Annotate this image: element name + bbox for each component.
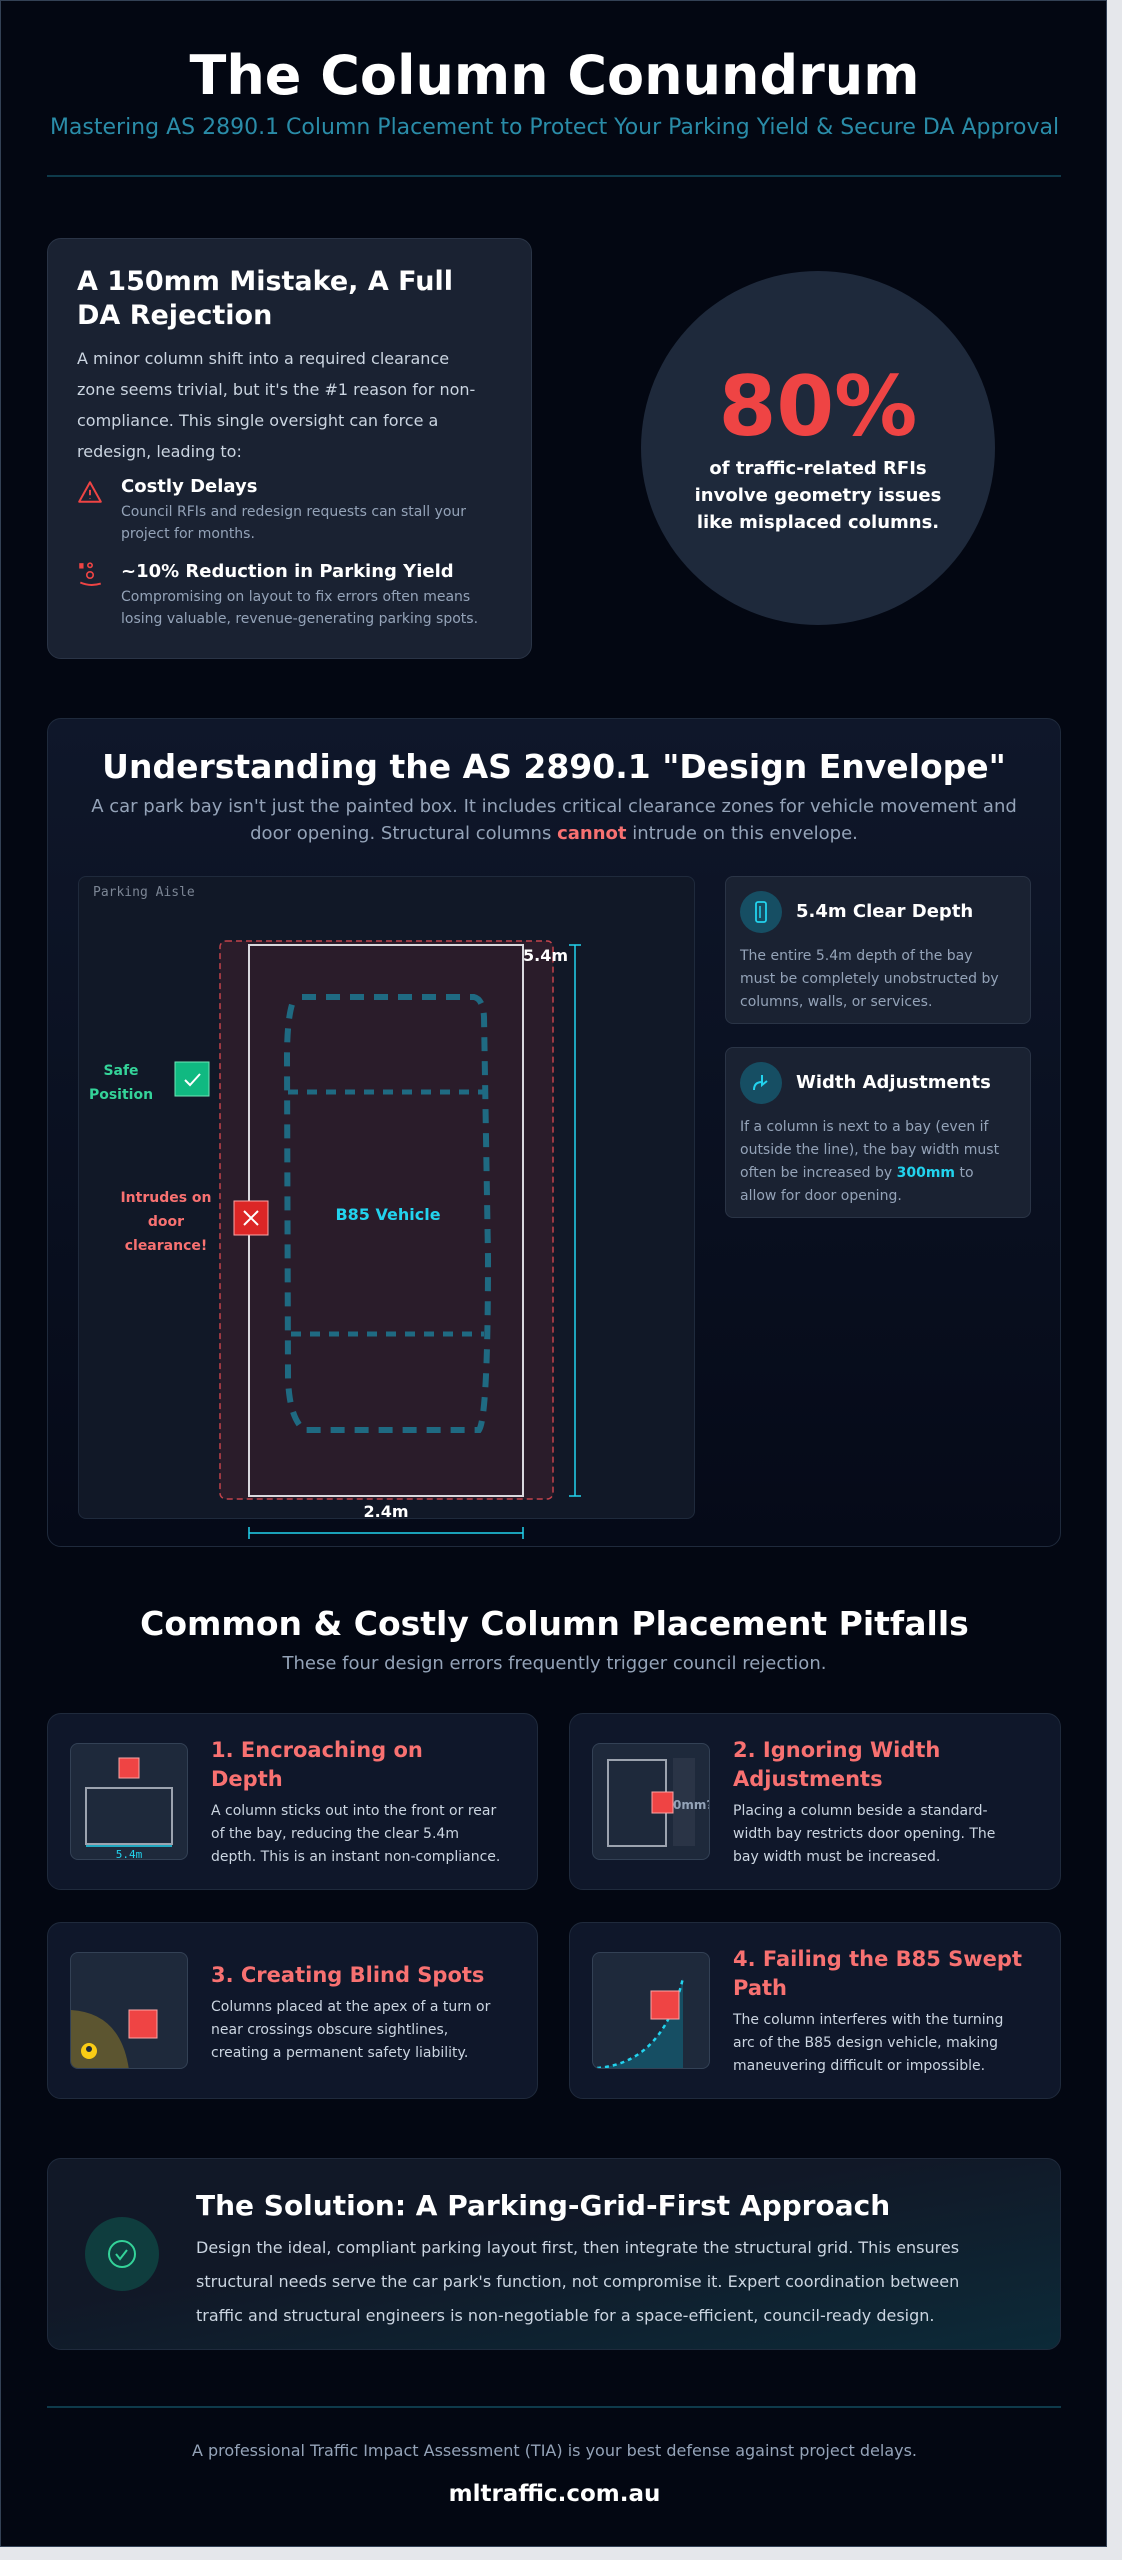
card: 5.4m clear depth xyxy=(725,876,1031,1024)
pitfall 4: arc of the B85 design vehicle, making xyxy=(733,2035,998,2051)
text block: A minor column shift into a required clearance xyxy=(77,349,449,368)
diagram: parking bay: Intrudes on xyxy=(120,1190,212,1206)
pitfall 4 xyxy=(569,1922,1061,2099)
text block xyxy=(196,2238,959,2325)
text block: structural needs serve the car park's function, not compromise it. Expert coordination between xyxy=(196,2272,959,2291)
pitfall 2: Placing a column beside a standard- xyxy=(733,1803,988,1819)
pitfall 1: of the bay, reducing the clear 5.4m xyxy=(211,1826,459,1842)
pitfall 2: width bay restricts door opening. The xyxy=(733,1826,995,1842)
item: yield reduction xyxy=(79,561,478,627)
icon: swept path thumbnail xyxy=(592,1952,710,2069)
item: yield reduction: ~10% Reduction in Parking Yield xyxy=(121,561,454,582)
pitfall 1: depth. This is an instant non-compliance. xyxy=(211,1849,500,1865)
heading: The Solution: A Parking-Grid-First Approach xyxy=(196,2189,890,2222)
title: The Column Conundrum xyxy=(190,44,919,107)
text block: traffic and structural engineers is non-negotiable for a space-efficient, council-ready design. xyxy=(196,2306,935,2325)
icon: yield xyxy=(79,562,101,586)
icon: blind spot thumbnail xyxy=(70,1952,188,2069)
heading: pitfalls: Common & Costly Column Placement Pitfalls xyxy=(140,1604,969,1643)
text block xyxy=(77,349,475,461)
icon: check circle xyxy=(85,2217,159,2291)
text block: zone seems trivial, but it's the #1 reason for non- xyxy=(77,380,475,399)
card: 5.4m clear depth: 5.4m Clear Depth xyxy=(796,901,973,922)
diagram: parking bay: 5.4m xyxy=(523,946,568,965)
card: width adjustments xyxy=(725,1047,1031,1218)
icon: depth thumbnail xyxy=(70,1743,188,1860)
footer url: mltraffic.com.au xyxy=(449,2481,660,2507)
pitfall 2: 2. Ignoring Width xyxy=(733,1738,940,1762)
heading: Understanding the AS 2890.1 "Design Envelope" xyxy=(102,747,1006,786)
pitfall 3: 3. Creating Blind Spots xyxy=(211,1963,484,1987)
pitfall 2: bay width must be increased. xyxy=(733,1849,940,1865)
card: width adjustments: If a column is next to a bay (even if xyxy=(740,1119,988,1135)
stat circle: 80%: of traffic-related RFIs involve geometry issues like misplaced columns. xyxy=(695,458,941,533)
text block: Design the ideal, compliant parking layout first, then integrate the structural grid. This ensures xyxy=(196,2238,959,2257)
text block: A car park bay isn't just the painted box. It includes critical clearance zones for vehicle movement and xyxy=(91,796,1017,817)
pitfall 4: Path xyxy=(733,1976,787,2000)
pitfall 2 xyxy=(569,1713,1061,1890)
diagram: parking bay xyxy=(78,876,695,1519)
subtitle: Mastering AS 2890.1 Column Placement to Protect Your Parking Yield & Secure DA Approval xyxy=(50,115,1059,140)
pitfall 3 xyxy=(47,1922,538,2099)
pitfall 1: 1. Encroaching on xyxy=(211,1738,423,1762)
subtitle: pitfalls: These four design errors frequently trigger council rejection. xyxy=(283,1653,826,1674)
pitfall 1: Depth xyxy=(211,1767,283,1791)
diagram: parking bay: Safe xyxy=(103,1063,139,1079)
diagram: parking bay: door xyxy=(148,1214,184,1230)
pitfall 4: 4. Failing the B85 Swept xyxy=(733,1947,1022,1971)
icon: width thumbnail xyxy=(592,1743,710,1860)
stat circle: 80% xyxy=(641,271,995,625)
card: 5.4m clear depth: must be completely unobstructed by xyxy=(740,971,999,987)
text block xyxy=(91,796,1017,844)
panel: design envelope xyxy=(47,718,1061,1547)
card: 5.4m clear depth: The entire 5.4m depth of the bay xyxy=(740,948,973,964)
diagram: parking bay: B85 Vehicle xyxy=(335,1205,441,1224)
pitfall 4: The column interferes with the turning xyxy=(733,2012,1003,2028)
item: yield reduction: Compromising on layout to fix errors often means losing valuable, revenue-generating parking spots. xyxy=(121,589,478,627)
card: width adjustments: outside the line), the bay width must xyxy=(740,1142,999,1158)
card: width adjustments: Width Adjustments xyxy=(796,1072,991,1093)
item: costly delays xyxy=(78,476,466,542)
icon: warning xyxy=(78,481,102,503)
pitfall 2: Adjustments xyxy=(733,1767,883,1791)
icon: door xyxy=(740,1062,782,1104)
diagram: parking bay: Position xyxy=(89,1087,153,1103)
text block: compliance. This single oversight can force a xyxy=(77,411,438,430)
diagram: parking bay: 2.4m xyxy=(363,1502,409,1521)
pitfall 1 xyxy=(47,1713,538,1890)
pitfall 1: A column sticks out into the front or rear xyxy=(211,1803,496,1819)
heading: A 150mm Mistake, A Full DA Rejection xyxy=(77,266,453,331)
footer text: A professional Traffic Impact Assessment (TIA) is your best defense against project delays. xyxy=(192,2441,917,2460)
diagram: parking bay: Parking Aisle xyxy=(93,885,195,900)
card: width adjustments: often be increased by 300mm to xyxy=(740,1165,974,1181)
icon: depth xyxy=(740,891,782,933)
panel: 150mm mistake xyxy=(47,238,532,659)
panel: solution xyxy=(47,2158,1061,2350)
stat circle: 80%: 80% xyxy=(719,358,917,455)
text block: redesign, leading to: xyxy=(77,442,242,461)
pitfall 3: near crossings obscure sightlines, xyxy=(211,2022,448,2038)
diagram: parking bay: clearance! xyxy=(125,1238,207,1254)
card: width adjustments: allow for door opening. xyxy=(740,1188,902,1204)
pitfall 4: maneuvering difficult or impossible. xyxy=(733,2058,985,2074)
item: costly delays: Council RFIs and redesign requests can stall your project for months. xyxy=(121,504,466,542)
pitfall 3: creating a permanent safety liability. xyxy=(211,2045,468,2061)
text block: door opening. Structural columns cannot intrude on this envelope. xyxy=(250,823,858,844)
pitfall 3: Columns placed at the apex of a turn or xyxy=(211,1999,490,2015)
card: 5.4m clear depth: columns, walls, or services. xyxy=(740,994,932,1010)
item: costly delays: Costly Delays xyxy=(121,476,257,497)
